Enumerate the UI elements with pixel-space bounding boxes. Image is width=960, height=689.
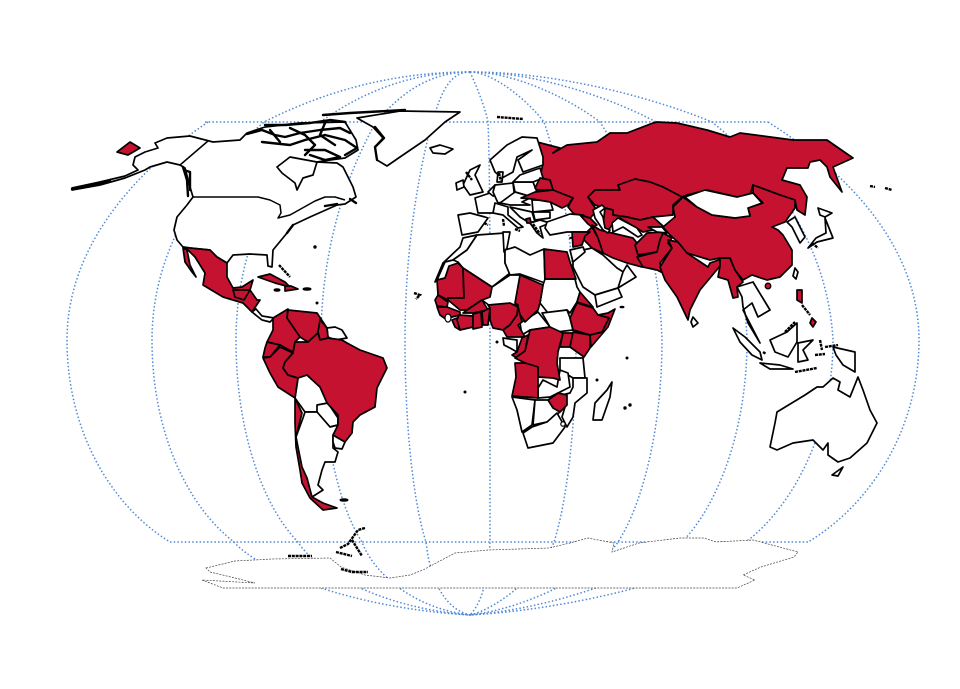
Panama and Caribbean islands (252, 246, 318, 322)
Falkland Islands (340, 499, 348, 501)
graticule: dotted blue meridians and parallels (67, 72, 919, 615)
East and Southeast Asia: white countries (691, 208, 877, 476)
Caspian Sea, Turkmenistan, Tajikistan and Mongolia (white) (593, 190, 762, 237)
Antarctic islands (288, 528, 368, 572)
Southeast Asia: island chains and coast detail (763, 186, 892, 372)
Antarctica: white landmass with thin dashed outline (202, 538, 798, 588)
South America: red countries (263, 309, 387, 510)
Canadian Arctic archipelago: dense coastline (72, 110, 405, 233)
Africa: small white enclaves and islands (414, 293, 631, 426)
Canada–US and Alaska borders (180, 141, 345, 218)
Europe: white countries (430, 137, 592, 238)
Red: Russia (537, 122, 853, 222)
Africa: red countries (435, 249, 615, 412)
Europe: coast detail and islands (466, 117, 540, 234)
Philippines: red islands (797, 290, 816, 327)
Red: Mexico, Central America and Caribbean (117, 142, 298, 312)
Red: eastern Europe, Central Asia, Middle East and South Asia (521, 178, 795, 320)
South America: white countries (295, 327, 347, 497)
Africa: white countries (435, 232, 636, 448)
North America: white countries (72, 111, 460, 267)
